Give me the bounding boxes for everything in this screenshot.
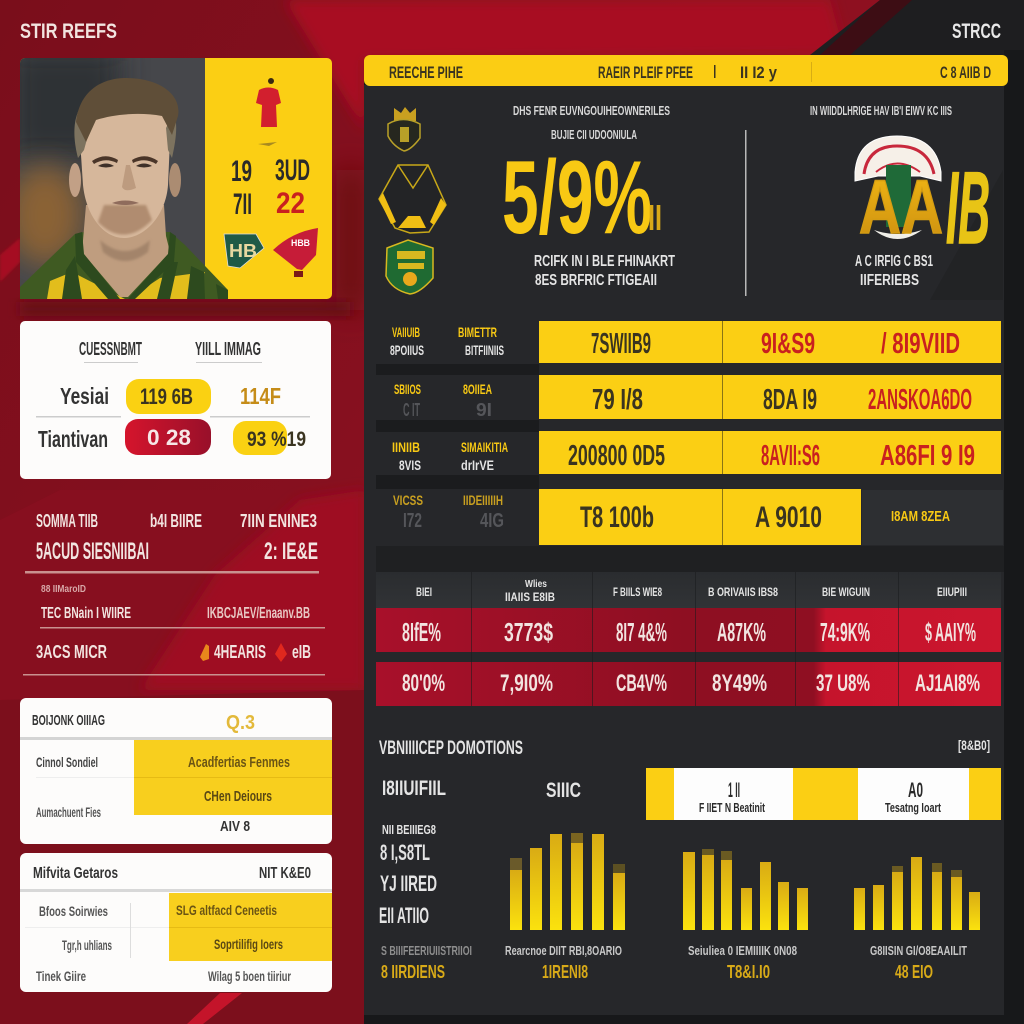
panel: score comparison card: Tiantivan	[38, 426, 108, 452]
yellow header bar: C 8 AIIB D	[940, 63, 991, 82]
panel: score comparison card: 0 28	[147, 425, 191, 450]
chart captions: Rearcnoe DIIT RBI,8OARIO	[505, 943, 622, 958]
panel: red percentage table: 80'0%	[402, 670, 445, 697]
panel: headline stat: IIFERIEBS	[860, 272, 919, 289]
row labels: 8OIIEA	[463, 381, 492, 397]
left stat list: NII BEIIIEG8	[382, 822, 436, 837]
yellow value rows: A86FI 9 I9	[880, 440, 975, 472]
red stats block: b4I BIIRE	[150, 511, 202, 531]
top-right label: STRCC	[952, 20, 1001, 43]
icon: red flame	[275, 643, 287, 662]
panel: card one: Cinnol Sondiel	[36, 754, 98, 770]
panel: red percentage table: IIAIIS E8IB	[505, 590, 555, 604]
row labels: VAIIUIB	[392, 324, 420, 340]
row labels: IIDEIIIIIH	[463, 492, 503, 508]
highlight strip	[646, 768, 1001, 820]
highlight strip: A0	[908, 779, 923, 802]
row labels: I72	[403, 510, 422, 532]
panel: headline stat	[379, 103, 990, 296]
red stats block: 5ACUD SIESNIIBAI	[36, 538, 149, 565]
left stat list: S BIIIFEERIUIISTRIIOI	[381, 943, 472, 958]
icon: red badge: HBB	[291, 238, 310, 248]
highlight strip: 1 II	[728, 779, 740, 802]
panel: headline stat: II	[648, 197, 662, 238]
icon: yellow outlined shirt	[379, 165, 446, 233]
row labels: BITFIINIIS	[465, 342, 504, 358]
panel: headline stat: 8ES BRFRIC FTIGEAII	[535, 272, 657, 289]
red stats block: eIB	[292, 642, 311, 662]
stat numbers: 22	[276, 187, 305, 220]
icon: orange flame	[200, 644, 209, 661]
row labels: drIrVE	[461, 457, 494, 473]
row labels: SIMAIKITIA	[461, 439, 508, 455]
yellow value rows: A 9010	[755, 501, 822, 534]
panel: card one: CHen Deiours	[204, 788, 272, 805]
icon: green badge: HB	[229, 241, 257, 261]
stat numbers: 3UD	[275, 154, 310, 187]
panel: card one: Aumachuent Fies	[36, 804, 101, 820]
row labels: 4IG	[480, 510, 504, 532]
yellow value rows: 7SWIIB9	[591, 328, 651, 360]
row labels: 9I	[476, 400, 492, 420]
chart captions: 48 EIO	[895, 962, 933, 982]
panel: card two	[20, 853, 332, 992]
panel: headline stat: DHS FENR EUVNGOUIHEOWNERILES	[513, 103, 670, 118]
highlight strip: F IIET N Beatinit	[699, 800, 765, 815]
logo emblem: AA	[859, 165, 943, 250]
panel: red percentage table: EIIUPIII	[937, 585, 967, 599]
panel: card one: Acadfertias Fenmes	[188, 754, 290, 771]
yellow header bar: REECHE PIHE	[389, 63, 463, 82]
yellow value rows: T8 100b	[580, 501, 654, 534]
red stats block: SOMMA TIIB	[36, 511, 98, 531]
panel: red percentage table: Wlies	[525, 579, 547, 590]
panel: card one	[20, 698, 332, 844]
panel: card two: Soprtilifig Ioers	[214, 936, 283, 952]
panel: red percentage table: 3773$	[504, 617, 553, 647]
red stats block: TEC BNain I WIIRE	[41, 605, 131, 622]
panel: score comparison card: Yesiai	[60, 383, 109, 409]
icon: green badge	[224, 234, 264, 268]
panel: score comparison card: YIILL IMMAG	[195, 339, 261, 359]
panel: card two: SLG altfacd Ceneetis	[176, 902, 277, 918]
icon: red shirt	[256, 78, 281, 146]
row labels: 8VIS	[399, 457, 421, 473]
panel: red percentage table: 8IfE%	[402, 617, 441, 647]
panel: card two: Mifvita Getaros	[33, 865, 118, 882]
big percentage: 5/9%	[502, 140, 652, 256]
logo emblem	[855, 136, 990, 265]
sub headings	[382, 777, 581, 802]
panel: score comparison card: 93 %19	[247, 428, 306, 451]
player portrait	[20, 78, 228, 299]
panel: player photo card	[7, 48, 332, 299]
row labels: VICSS	[393, 492, 423, 508]
section tag: [8&B0]	[958, 737, 990, 753]
left stat list: EII ATIIO	[379, 903, 429, 928]
red stats block	[23, 511, 325, 676]
panel: card two: Tgr,h uhlians	[62, 937, 112, 953]
panel: card one: BOIJONK OIIIAG	[32, 712, 105, 729]
panel: card two: NIT K&E0	[259, 865, 311, 882]
yellow value rows: I8AM 8ZEA	[891, 508, 950, 525]
panel: red percentage table: 8Y49%	[712, 670, 767, 697]
section heading: VBNIIIICEP DOMOTIONS	[379, 738, 523, 759]
bar chart: group three	[854, 857, 980, 930]
yellow header bar: II I2 y	[740, 63, 777, 82]
yellow value rows: 8DA I9	[763, 384, 817, 416]
row labels: 8POIIUS	[390, 342, 424, 358]
red stats block: 2: IE&E	[264, 538, 318, 565]
panel: headline stat: BUJIE CII UDOONIULA	[551, 127, 637, 142]
dark dashboard panel	[364, 50, 1024, 1024]
panel: headline stat: A C IRFIG C BS1	[855, 253, 933, 270]
panel: score comparison card: 114F	[240, 383, 281, 409]
panel: red percentage table: F BIILS WIE8	[613, 585, 662, 599]
left stat list: 8 I,S8TL	[380, 840, 430, 865]
yellow value rows: 79 I/8	[592, 384, 643, 416]
red stats block: 3ACS MICR	[36, 642, 107, 662]
panel: card two: Tinek Giire	[36, 968, 86, 984]
panel: results table	[376, 321, 1003, 545]
bar chart: group one	[510, 833, 625, 930]
icon: red badge	[273, 228, 318, 277]
panel: red percentage table: 74:9K%	[820, 617, 870, 647]
panel: red percentage table: BIE WIGUIN	[822, 585, 870, 599]
red stats block: 7IIN ENINE3	[240, 511, 317, 531]
panel: red percentage table: 7,9I0%	[500, 670, 553, 697]
row labels: C IT	[403, 400, 420, 420]
panel: red percentage table: AJ1AI8%	[915, 670, 980, 697]
icon: crest top	[388, 107, 420, 151]
bar chart: group two	[683, 849, 808, 930]
chart captions: T8&I.I0	[727, 962, 770, 982]
panel: red percentage table: 37 U8%	[816, 670, 870, 697]
icon: green crest	[386, 240, 433, 294]
stat numbers	[231, 154, 310, 221]
left stat list: YJ IIRED	[380, 871, 437, 896]
highlight strip: Tesatng Ioart	[885, 800, 941, 815]
chart captions: Seiuliea 0 IEMIIIIK 0N08	[688, 943, 797, 958]
panel: score comparison card	[20, 321, 331, 479]
row labels: IINIIB	[392, 439, 420, 455]
red stats block: 4HEARIS	[214, 642, 266, 662]
panel: headline stat: RCIFK IN I BLE FHINAKRT	[534, 253, 675, 270]
chart captions: G8IISIN GI/O8EAAILIT	[870, 943, 967, 958]
page title: STIR REEFS	[20, 20, 117, 43]
panel: score comparison card: 119 6B	[140, 384, 193, 409]
chart captions	[505, 943, 967, 982]
row labels	[390, 324, 508, 532]
panel: red percentage table: 8I7 4&%	[616, 617, 667, 647]
panel: card two: Bfoos Soirwies	[39, 903, 108, 919]
row labels: SBIIOS	[394, 381, 421, 397]
panel: red percentage table: CB4V%	[616, 670, 667, 697]
yellow header bar	[364, 55, 1008, 86]
yellow header bar: RAEIR PLEIF PFEE	[598, 63, 693, 82]
yellow value rows	[539, 321, 1003, 545]
yellow value rows: / 8I9VIID	[881, 328, 960, 360]
yellow value rows: 9I&S9	[761, 328, 815, 360]
sub headings: SIIIC	[546, 779, 581, 802]
panel: red percentage table: B ORIVAIIS IBS8	[708, 585, 778, 599]
panel: score comparison card: CUESSNBMT	[79, 339, 142, 359]
panel: card two: Wilag 5 boen tiiriur	[208, 968, 291, 984]
yellow value rows: 8AVII:S6	[761, 440, 820, 472]
panel: red percentage table: BIEI	[416, 585, 432, 599]
row labels: BIMETTR	[458, 324, 497, 340]
panel: card one: AIV 8	[220, 818, 250, 835]
chart captions: 1IRENI8	[542, 962, 588, 982]
panel: red percentage table	[376, 572, 1001, 706]
panel: card one: Q.3	[226, 712, 255, 734]
sub headings: I8IIUIFIIL	[382, 777, 446, 800]
left stat list	[379, 822, 472, 982]
red stats block: IKBCJAEV/Enaanv.BB	[207, 605, 310, 622]
yellow value rows: 200800 0D5	[568, 440, 665, 472]
panel: red percentage table: A87K%	[717, 617, 766, 647]
left stat list: 8 IIRDIENS	[381, 962, 445, 982]
stat numbers: 7II	[233, 188, 252, 221]
stat numbers: 19	[231, 155, 252, 188]
red stats block: 88 IIMaroID	[41, 584, 86, 595]
